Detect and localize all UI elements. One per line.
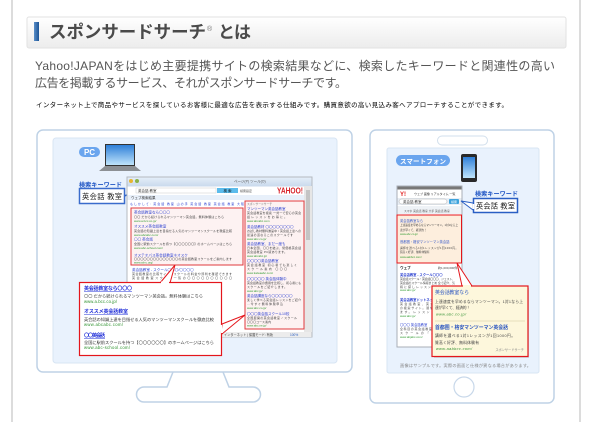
intro paragraph: Yahoo!JAPANをはじめ主要提携サイトの検索結果などに、検索したキーワードと関連性の高い [35,58,555,73]
heading bar: とは [218,23,251,42]
ad block: top sponsored results: 英会話の知識上達を目指せる人気のマンツーマンスクールを徹底比較 [134,228,232,233]
search keyword label: 検索キーワード [79,181,122,189]
callout: ad enlargement [80,265,245,356]
phone results: 約1,000,000件 [438,265,457,270]
browser screenshot: ウェブ検索結果 [131,195,156,200]
ad block: side sponsored results: 楽しく学べる英会話レッスンをご紹介 [247,297,301,302]
monitor stand [136,372,260,402]
callout: ad enlargement: 〇〇 だから続けられるマンツーマン英会話。無料体験はこちら [84,292,203,300]
ad block: top sponsored results: www.abcabc.com/ [134,233,158,237]
ad block: phone sponsored results: 質高く好評、無料体験有 [400,250,430,254]
phone results: 全科目の英会話教室を紹介 英会話 [400,326,455,331]
ad block: side sponsored results: 英会話教室 初心者でも楽しく [247,262,297,267]
phone screenshot [397,186,462,347]
smartphone label: スマートフォン [400,158,446,166]
ad block: phone sponsored results: 講師を選べる1対1レッスンが1回1000円。 [400,246,458,250]
phone results: スクールの「英語一番」 [400,330,455,335]
callout: phone ad enlargement: 達が早くて、経済的！ [435,305,470,310]
ad block: side sponsored results: 最速の道ならこのスクールです [247,232,293,237]
ad block: top sponsored results: 〇〇〇〇〇〇〇〇〇〇〇〇〇〇の英会話教室スクールをご案内します [134,256,232,261]
phone results: ウェブ [400,265,411,270]
ad block: top sponsored results: 英会話教室なら〇〇〇 [134,210,170,214]
phone body [370,130,554,403]
ad block: side sponsored results: 〇〇〇英会話スクール10校 [247,311,290,316]
ad block: phone sponsored results [397,215,462,263]
sub text: インターネット上で商品やサービスを探しているお客様に最適な広告を表示する仕組みです。購買意欲の高い見込み客へアプローチすることができます。 [36,100,508,109]
callout: ad enlargement: オススメ英会話教室 [84,308,128,315]
callout: phone ad enlargement: 上達速度を早めるならマンツーマン。1対1なら上 [435,299,523,304]
ad block: top sponsored results: 全国に駅前スクールを持つ【〇〇〇〇〇〇】のホームページはこちら [134,241,232,246]
callout: phone ad enlargement: スポンサードサーチ [495,347,524,352]
panel: PC monitor [37,130,352,402]
status bar [128,332,312,337]
monitor frame [37,130,352,372]
heading bar: スポンサードサーチ [49,22,206,42]
ad block: phone sponsored results: 達が早くて、経済的！ [400,228,427,232]
ad block: phone sponsored results: www.abc.co.jp/ [400,232,418,236]
browser screenshot: 検 索 [224,188,232,193]
callout: phone ad enlargement: 講師を選べる1対1レッスンが1回1000円。 [435,333,515,338]
ad block: side sponsored results: 英会話講座なら〇〇〇〇〇〇 [247,293,293,298]
callout: phone ad enlargement [432,263,529,358]
intro paragraph [35,58,555,90]
ad block: top sponsored results: オススメ英会話教室 [134,224,167,228]
ad block: phone sponsored results: 首都圏・格安マンツーマン英会話 [400,239,450,244]
caption: 画像はサンプルです。実際の画面と仕様が異なる場合があります。 [400,362,531,369]
callout: ad enlargement: www.a.bcc.co.jp/ [84,299,118,304]
ad block: side sponsored results: …今すぐ無料体験申込 [247,301,283,306]
callout: phone ad enlargement: 質高く好評、無料体験有 [435,340,479,345]
icon: laptop [99,144,141,171]
ad block: side sponsored results [245,201,304,329]
ad block: top sponsored results: www.abc-school.com/ [134,246,163,250]
ad block: side sponsored results: 日本全国、〇〇を結ぶ、低価格英会話 [247,245,301,250]
browser screenshot: インターネット | 保護モード: 有効 [224,332,273,337]
PC label: PC [84,148,95,157]
ad block: phone sponsored results: www.aabbcc.com/ [400,255,422,259]
ad block: top sponsored results: www.ab-c.org/ [134,260,153,264]
ad block: side sponsored results: www.abcabc.jp/ [247,254,267,258]
ad block: side sponsored results: 全国展開の英会話教室 / スクール [247,315,297,320]
organic results: 英会話教室 - スクール〇〇〇/〇〇〇〇 [132,267,194,272]
phone results: 軽に探しレッスン気軽申込まで [400,284,455,289]
ad block: side sponsored results: お試し教材無料進呈中 / 英会話上達への [247,228,301,233]
phone results: 英会話教室、英会話スクール [400,301,455,306]
callout: ad enlargement: www.abcabc.com/ [84,322,124,327]
PC label [79,147,100,157]
phone results [398,265,461,346]
phone results: 英会話のスクール情報まとめ 全て紹介、気 [400,280,455,285]
phone results: www.abjabc.com/ [400,335,423,339]
ad block: side sponsored results: 〇〇〇〇〇 英会話体験中 [247,276,287,281]
ad block: side sponsored results: スポンサードサーチ [247,202,272,206]
phone results: www.abc.jp/ [400,288,416,292]
callout: ad enlargement: www.abc-school.com/ [84,345,131,350]
phone results: 英会話教室 - スクール〇〇〇 [400,272,443,277]
ad block: side sponsored results: 英会話教室 PC版あります。 [247,249,287,254]
browser screenshot: 英会話 教室 [138,188,157,193]
phone results: 英会話スクール・英会話〇〇〇、ジェスト、 [400,276,455,281]
home button [454,377,474,397]
callout: ad enlargement: 全国に駅前スクールを持つ【〇〇〇〇〇〇】のホームページはこちら [84,339,214,346]
callout: phone ad enlargement: 首都圏・格安マンツーマン英会話 [435,324,508,331]
ad block: side sponsored results: スクール案内 〇〇〇 [247,266,287,271]
organic results: 英会話教室スクール一覧の〇〇〇〇〇〇〇〇〇〇 [132,275,232,280]
ad block: top sponsored results: オステオパス英会話教室ネオスク [134,252,188,258]
ad block: side sponsored results: www.abc.jp/ [247,289,263,293]
ad block: top sponsored results: www.a.bcc.co.jp/ [134,219,157,223]
ad block: side sponsored results: マンツーマン英会話教室 [247,206,286,211]
ad block: side sponsored results: www.abc.ne.jp/ [247,324,267,328]
callout: ad enlargement: 英会話の知識上達を目指せる人気のマンツーマンスクールを徹底比較 [84,316,215,323]
ad block: top sponsored results: 〇〇 だから続けられるマンツーマン英会話。無料体験はこちら [134,214,224,219]
browser screenshot: もしかして: 英会話 教室 山の手 英会話 教室 英会話 教室 大阪 1対1 [130,201,255,206]
browser screenshot [127,177,312,337]
heading bar [27,17,566,48]
ad block: side sponsored results: 〇〇〇コース案内 [247,319,271,324]
ad block: side sponsored results: 英会話教室の費用を比較し、初心者にも [247,280,301,285]
phone screenshot: ウェブ 画像 リアルタイム 一覧 [414,191,455,196]
ad block: side sponsored results: www.kaiwaabc.com/ [247,271,273,275]
callout: phone ad enlargement: www.aabbcc.com/ [436,347,473,351]
ad block: top sponsored results: 〇〇 英会話 [134,236,153,242]
monitor screen [53,138,337,363]
ad block: side sponsored results: 〇〇〇〇英会話教室 [247,258,279,263]
ad block: side sponsored results: www.abc.co.jp/ [247,237,266,241]
phone screenshot: Y! [400,192,406,198]
panel: smartphone [370,130,554,403]
search keyword label [79,181,142,204]
phone results: 〇〇〇 英会話教室 [400,322,428,327]
ad block: side sponsored results: 話レッスンをお得に。 [247,214,287,219]
phone results: の検索サイト。通学範囲で探す。 [400,305,455,310]
callout: phone ad enlargement: www.abc.co.jp/ [436,312,467,316]
ad block: side sponsored results: 英会話教材 〇〇〇〇〇〇〇〇 [247,224,294,229]
phone results: www.abc.jp/ [400,314,416,318]
phone screenshot: スマホ 英会話 教室 大手 英会話 教室 [404,209,450,213]
browser screenshot: 検索設定 [240,188,252,193]
phone screen [387,148,539,373]
browser screenshot: 100% [290,333,298,337]
callout: ad enlargement: 英会話教室なら〇〇〇 [84,285,132,292]
ad block: phone sponsored results: 英会話教室なら [400,218,423,223]
logo: Yahoo: YAHOO! [277,186,303,196]
ad block: phone sponsored results: 上達速度を早めるならマンツーマン。1対1なら上 [400,223,458,227]
search keyword label: 検索キーワード [475,190,518,198]
organic results: 英会話教室の比較サイト。スクールの料金や評判を確認できます [132,271,232,276]
ad block: side sponsored results: スクールをご紹介します。 [247,284,287,289]
icon: smartphone [461,154,477,182]
organic results [132,267,232,280]
callout: phone ad enlargement: 英会話教室なら [435,289,469,296]
browser screenshot: ページ(P) ツール(O) [234,180,266,184]
phone speaker [438,136,488,145]
ad block: side sponsored results: 英会話教室を検索 一対一で安心の英会 [247,210,301,215]
search keyword label: 英会話 教室 [82,192,122,201]
phone results: ます。レッスン / 授業料 [400,309,450,314]
ad block: top sponsored results [131,208,243,265]
heading bar: ® [207,25,213,33]
ad block: side sponsored results: www.abcabc.com [247,219,270,223]
smartphone label [396,155,450,166]
ad block: side sponsored results: 英会話教室、まだ一度も [247,241,286,246]
callout: ad enlargement: 〇〇英会話 [84,332,105,339]
ad block: side sponsored results: www.abc.co.jp/ [247,306,266,310]
phone screenshot: 検索 [451,199,457,204]
intro paragraph: 広告を掲載するサービス、それがスポンサードサーチです。 [35,75,347,90]
phone results: 英会話教室ドットネット [400,297,436,302]
phone screenshot: 英会話 教室 [403,199,422,204]
search keyword label [461,190,518,212]
search keyword label: 英会話 教室 [476,202,515,210]
